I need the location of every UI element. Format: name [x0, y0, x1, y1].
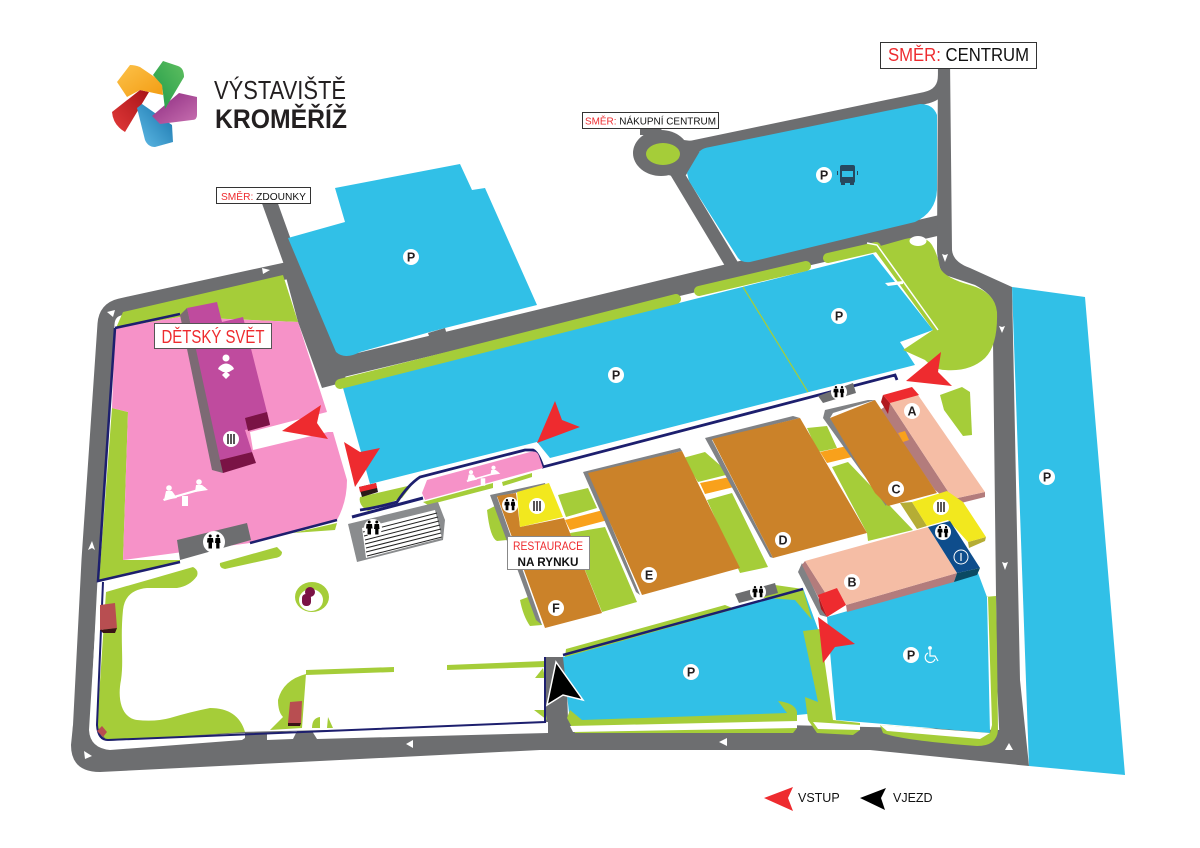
parking: disabled: P — [907, 648, 915, 662]
parking: main: P — [612, 368, 620, 382]
hall E: E — [645, 568, 653, 582]
parking: east — [1012, 287, 1125, 775]
restaurant yellow block — [900, 491, 986, 548]
green areas — [97, 143, 998, 746]
entrance arrow: north east — [906, 352, 952, 386]
building: toilets — [177, 523, 251, 560]
legend: VJEZD — [893, 791, 933, 805]
panel: children's world — [112, 302, 347, 560]
building: children's world hall — [180, 302, 270, 473]
label: restaurant: NA RYNKU — [518, 555, 578, 569]
logo text: VÝSTAVIŠTĚ — [214, 75, 346, 105]
hall C: C — [891, 482, 901, 496]
fence lines — [97, 314, 897, 740]
road direction arrows — [84, 254, 1013, 759]
white paths — [89, 236, 990, 750]
entrance arrow: west — [344, 442, 380, 487]
icon: wheelchair — [925, 647, 938, 662]
hall D — [705, 416, 867, 558]
parking: top left: P — [407, 250, 415, 264]
icon: bus — [837, 165, 858, 185]
red stage kiosk — [359, 483, 378, 497]
small red buildings — [97, 603, 302, 737]
label: restaurant: RESTAURACE — [513, 539, 583, 553]
vehicle entrance arrow — [547, 662, 583, 705]
logo mark — [112, 61, 197, 147]
label: restaurant — [508, 536, 590, 570]
parking: east: P — [1043, 470, 1051, 484]
hall F with restaurant — [490, 483, 608, 628]
entrance arrow: middle — [537, 401, 580, 443]
hall A: A — [907, 404, 917, 418]
hall B with information: B — [847, 576, 857, 590]
label: direction zdounky: SMĚR: ZDOUNKY — [221, 190, 306, 203]
hall B with information — [798, 521, 980, 617]
logo text: KROMĚŘÍŽ — [215, 103, 347, 134]
tree group — [295, 582, 329, 612]
roads — [71, 60, 1029, 772]
entrance arrow: south east — [818, 617, 855, 663]
connector orange D-C — [820, 446, 852, 463]
parking: disabled — [827, 573, 990, 733]
icon: baby — [218, 354, 234, 379]
parking: bus — [687, 104, 937, 262]
label: direction shopping centre: SMĚR: NÁKUPNÍ CENTRUM — [585, 114, 716, 128]
hall E — [583, 448, 740, 595]
logo text — [214, 75, 347, 134]
entrance arrow: children's world — [282, 405, 328, 439]
hall D: D — [778, 534, 788, 548]
hall C — [823, 400, 937, 506]
parking: main: P — [835, 310, 843, 324]
label: direction zdounky — [216, 188, 310, 204]
connector orange E-D — [700, 477, 734, 494]
building: stage — [348, 502, 445, 562]
parking: south: P — [687, 666, 695, 680]
hall A — [880, 387, 985, 505]
toilets south — [735, 583, 778, 603]
parking: main — [343, 254, 933, 484]
parking: top left — [288, 164, 537, 356]
legend: VSTUP — [798, 791, 840, 805]
icon: seesaw — [163, 479, 208, 506]
label: direction centrum: SMĚR: CENTRUM — [888, 45, 1029, 65]
icon: information — [954, 550, 968, 564]
legend — [764, 787, 933, 811]
toilets north — [818, 383, 856, 403]
label: children's world — [154, 324, 272, 348]
small pink playground — [422, 452, 543, 500]
label: children's world: DĚTSKÝ SVĚT — [162, 327, 265, 347]
parking: bus: P — [820, 168, 828, 182]
hall F with restaurant: F — [552, 602, 560, 616]
parking: south — [563, 588, 828, 722]
